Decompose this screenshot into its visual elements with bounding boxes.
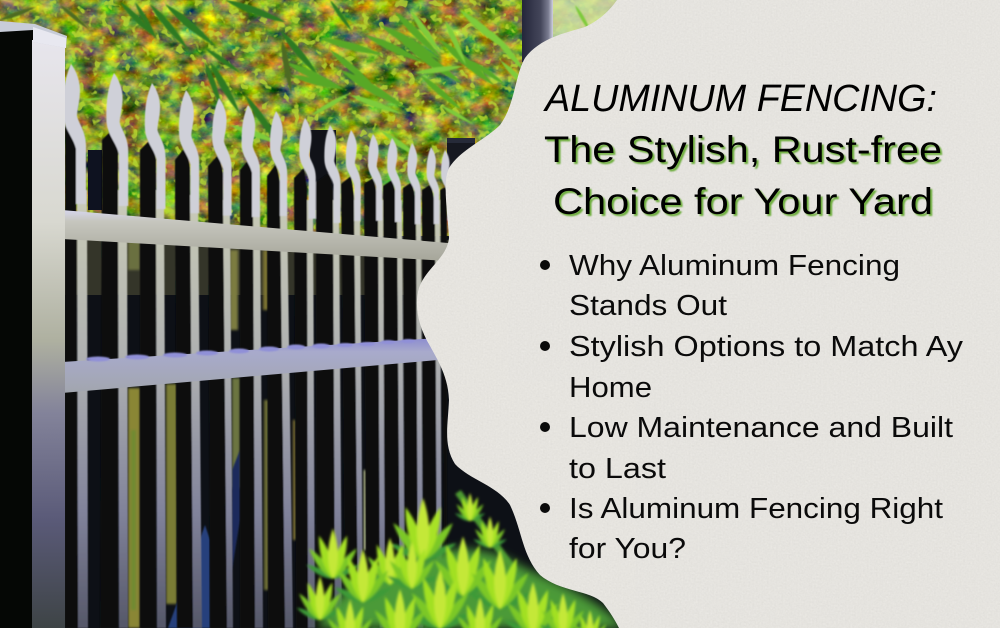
title line 3: Choice for Your Yard: [553, 181, 933, 222]
bullet 4: Is Aluminum Fencing Right: [569, 493, 943, 525]
bullet 2: [540, 331, 964, 404]
bullet 3: [540, 412, 953, 485]
panel: wavy paper panel: [400, 0, 1000, 628]
bullet 2: Home: [569, 372, 652, 404]
background post at top: [522, 0, 553, 62]
bullet 1: [540, 250, 900, 322]
bullet list: [540, 250, 964, 565]
bullet 4: for You?: [569, 533, 686, 565]
bullet 3: Low Maintenance and Built: [569, 412, 953, 444]
title line 1: ALUMINUM FENCING:: [543, 78, 937, 120]
title line 3 green shadow: Choice for Your Yard: [555, 183, 935, 224]
title line 2: The Stylish, Rust-free: [544, 129, 942, 170]
bullet 4: [540, 493, 943, 565]
title: [543, 78, 944, 224]
fence pickets: [63, 64, 452, 628]
bullet 1: Stands Out: [569, 290, 727, 322]
fence: lower rail: [62, 338, 438, 393]
bullet 2: Stylish Options to Match Ay: [569, 331, 964, 363]
picket silver strips: [77, 190, 442, 628]
shrub in the foreground: [295, 492, 625, 628]
fence: corner post: [0, 21, 67, 628]
bullet 3: to Last: [569, 453, 666, 485]
fence: background behind lower pickets: [65, 130, 475, 628]
picket dark bars: [65, 124, 447, 628]
fence: upper rail: [62, 210, 448, 261]
title line 2 green shadow: The Stylish, Rust-free: [546, 131, 944, 172]
bullet 1: Why Aluminum Fencing: [569, 250, 900, 282]
picket spear tips: [63, 64, 452, 224]
